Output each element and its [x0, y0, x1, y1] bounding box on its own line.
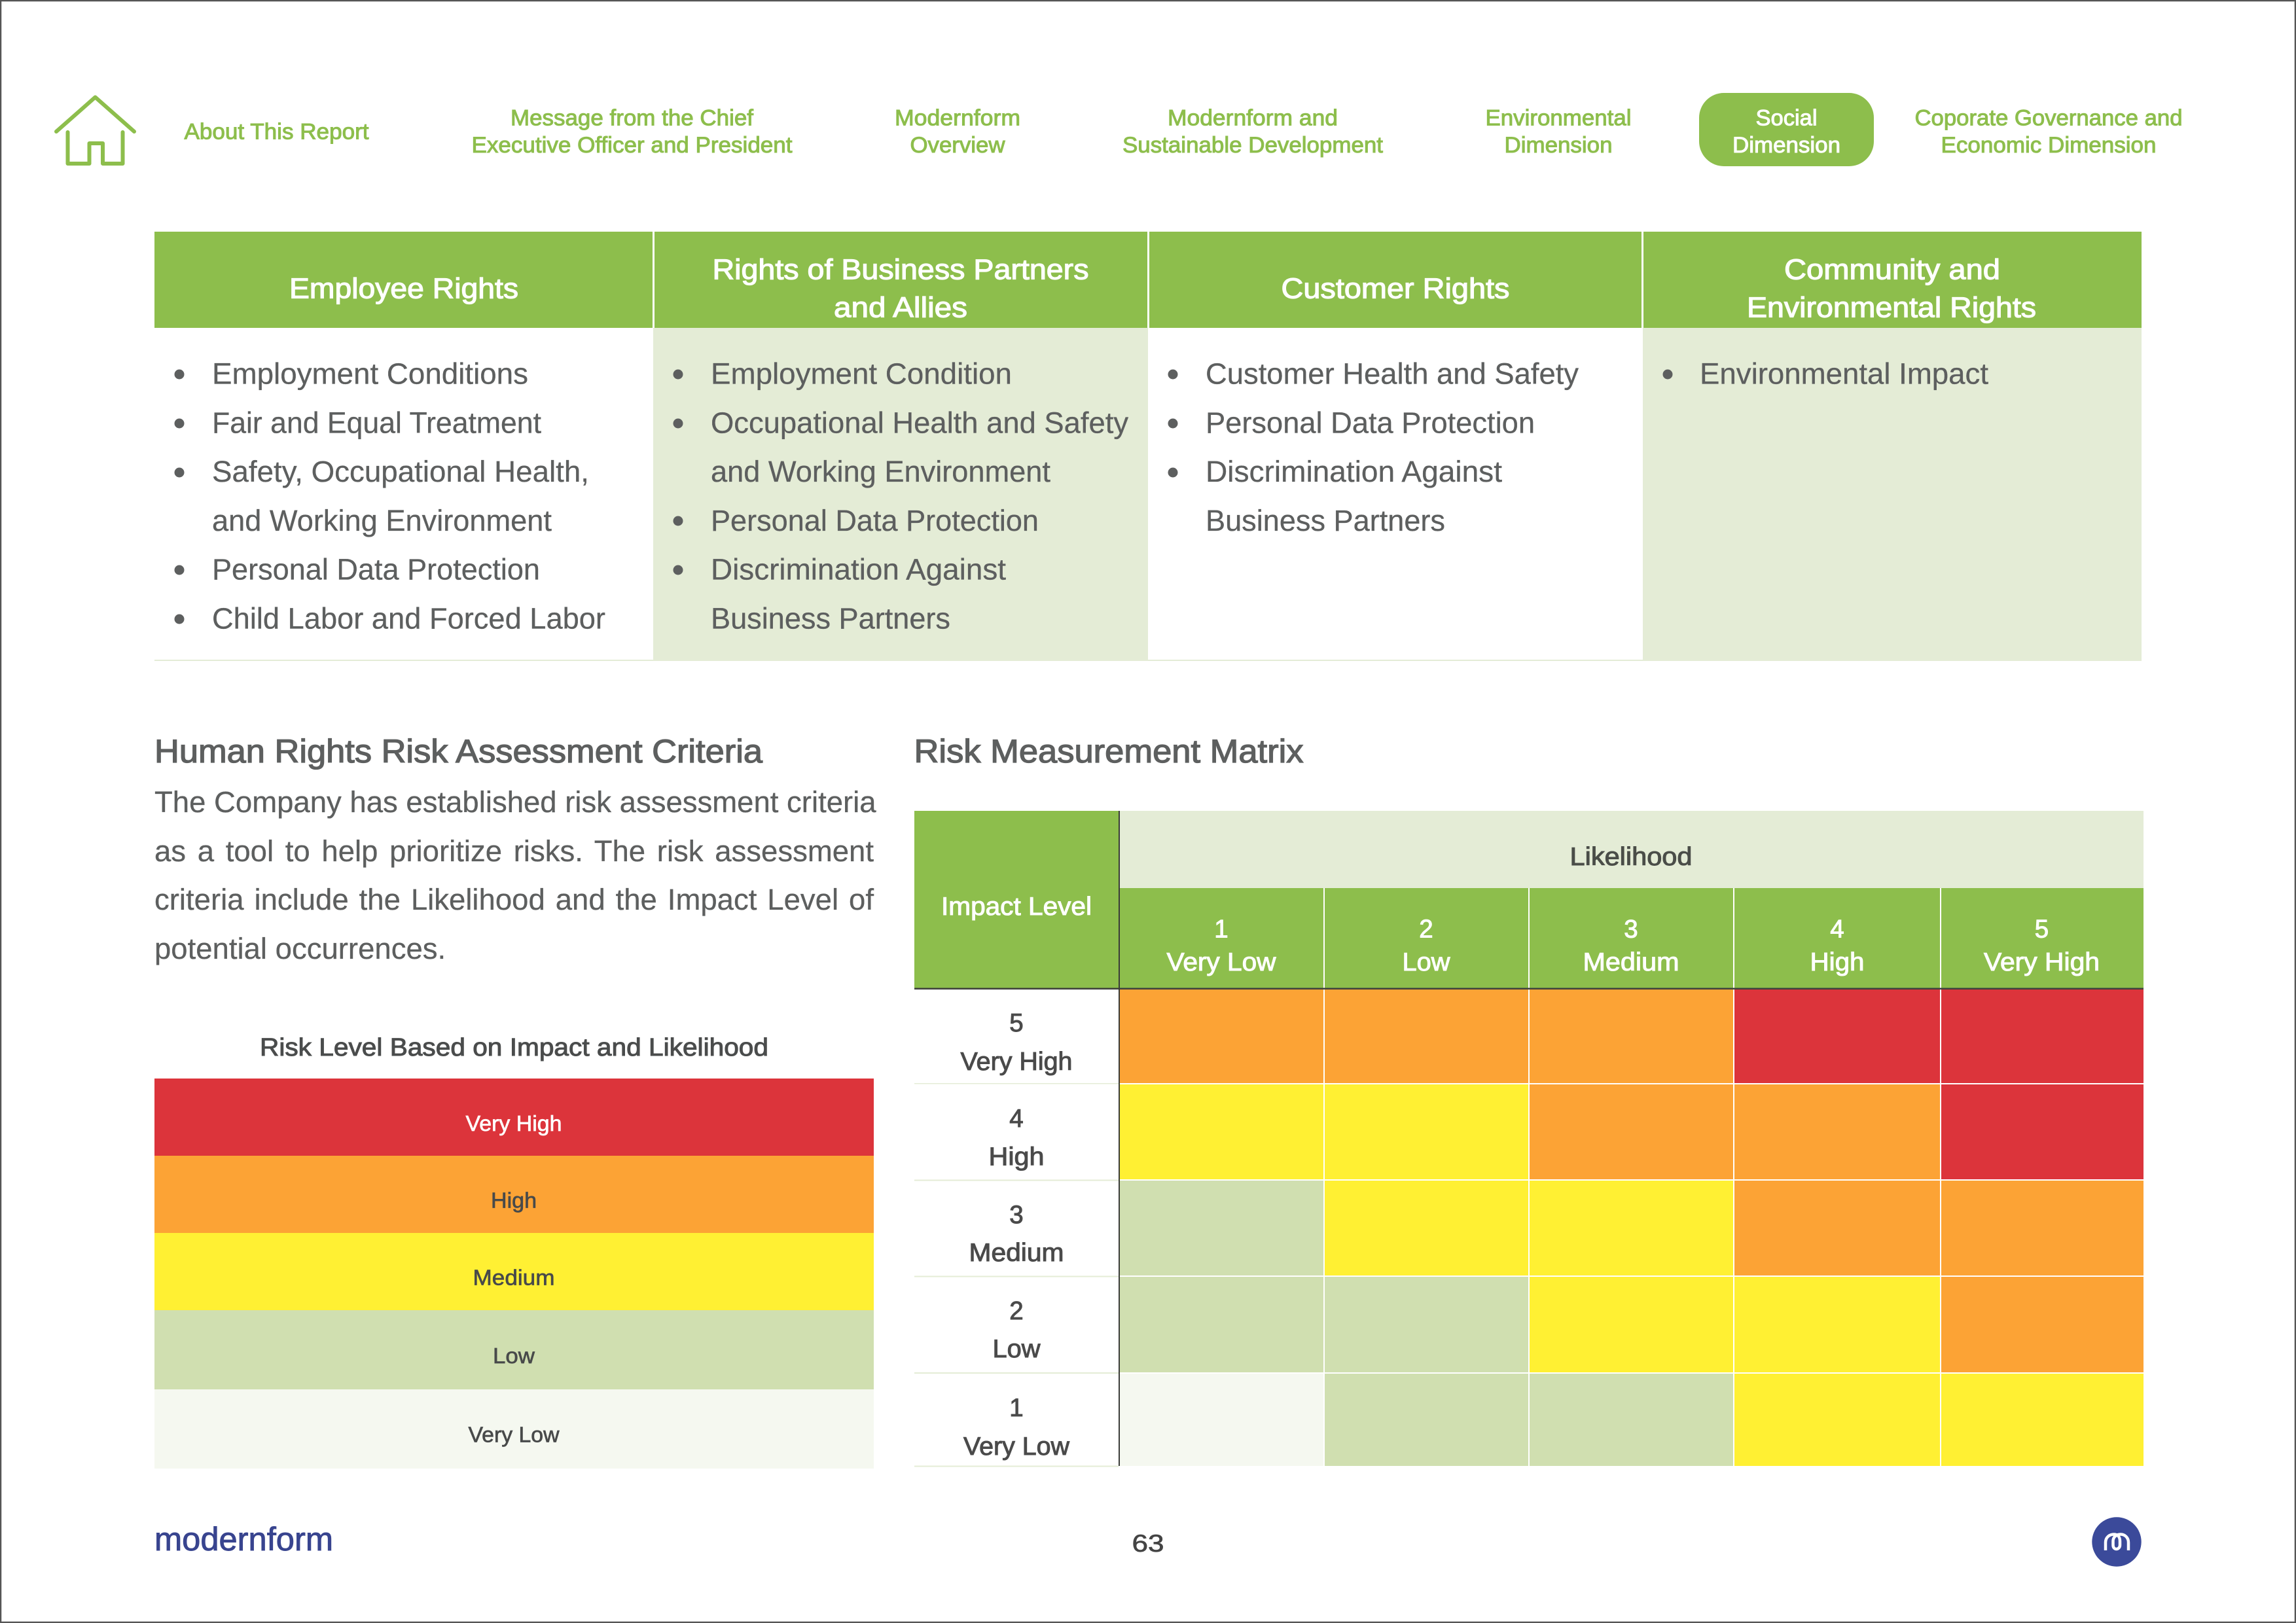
table header row: Environmental Rights [1747, 292, 2036, 323]
table header row [154, 232, 2142, 328]
list: community and environmental rights: Environmental Impact [1700, 357, 1988, 390]
text block: risk assessment description [154, 785, 876, 965]
legend: risk level bars: High [491, 1188, 537, 1213]
matrix header: 1 [1214, 915, 1229, 944]
table header row: Employee Rights [289, 272, 518, 305]
text block: risk assessment description: potential occurrences. [154, 932, 446, 965]
matrix header: Very High [1984, 948, 2100, 976]
nav: corporate governance [1915, 106, 2182, 158]
legend: risk level bars [154, 1079, 874, 1469]
nav: modernform overview [895, 106, 1020, 158]
list: customer rights: Personal Data Protection [1206, 406, 1535, 440]
matrix row labels: 2 [1009, 1297, 1024, 1325]
panel: stakeholder rights table [154, 232, 2142, 661]
legend: risk level bars: Medium [473, 1266, 555, 1291]
matrix row labels: High [988, 1143, 1045, 1171]
list: business partner rights [673, 357, 1128, 635]
matrix row labels: Very High [961, 1048, 1072, 1076]
nav: social dimension active pill: Dimension [1732, 133, 1840, 158]
matrix header: 4 [1830, 915, 1844, 944]
list: customer rights: Discrimination Against [1206, 455, 1502, 488]
matrix row labels: 1 [1009, 1394, 1024, 1422]
nav: about this report: About This Report [185, 119, 369, 144]
list: business partner rights: Discrimination Against [711, 552, 1006, 586]
matrix header: Low [1402, 948, 1450, 976]
list: employee rights: and Working Environment [212, 504, 552, 537]
text block: risk assessment description: as a tool to help prioritize risks. The risk assessment [154, 834, 874, 868]
list: business partner rights: and Working Environment [711, 455, 1050, 488]
list: employee rights: Fair and Equal Treatment [212, 406, 541, 440]
heading: risk level legend: Risk Level Based on Impact and Likelihood [260, 1034, 768, 1061]
matrix row labels [961, 1009, 1072, 1461]
nav: social dimension active pill: Social [1755, 106, 1817, 131]
icon: modernform circular logo [2092, 1517, 2142, 1567]
list: employee rights: Personal Data Protection [212, 552, 540, 586]
matrix row labels: 5 [1009, 1009, 1024, 1037]
list: business partner rights: Business Partners [711, 602, 950, 635]
nav: environmental dimension: Environmental [1486, 106, 1631, 131]
list: customer rights: Customer Health and Safety [1206, 357, 1579, 390]
nav: message from the CEO: Executive Officer and President [471, 133, 793, 158]
table header row: Customer Rights [1282, 272, 1509, 305]
text block: risk assessment description: criteria include the Likelihood and the Impact Level of [154, 883, 874, 916]
matrix heat cells [1120, 990, 2144, 1466]
nav: modernform overview: Overview [910, 133, 1005, 158]
matrix row labels: Very Low [963, 1433, 1069, 1461]
legend: risk level bars: Low [493, 1344, 535, 1368]
navigation menu [185, 93, 2182, 166]
table backgrounds [154, 328, 2142, 661]
legend: risk level bars: Very Low [469, 1423, 560, 1448]
nav: message from the CEO [471, 106, 793, 158]
table header row: and Allies [834, 292, 967, 323]
nav: corporate governance: Economic Dimension [1941, 133, 2156, 158]
nav: modernform overview: Modernform [895, 106, 1020, 131]
nav: environmental dimension: Dimension [1504, 133, 1613, 158]
list: employee rights: Child Labor and Forced Labor [212, 602, 605, 635]
heading: risk assessment criteria: Human Rights Risk Assessment Criteria [154, 733, 762, 770]
matrix header: 2 [1419, 915, 1433, 944]
list: employee rights [174, 357, 605, 635]
icon: home [56, 97, 134, 164]
nav: message from the CEO: Message from the Chief [511, 106, 754, 131]
matrix header: Medium [1583, 948, 1679, 976]
list: employee rights: Safety, Occupational Health, [212, 455, 589, 488]
matrix row labels: Low [992, 1335, 1041, 1363]
list: business partner rights: Occupational Health and Safety [711, 406, 1128, 440]
matrix header: Impact Level [941, 893, 1092, 921]
matrix row labels: 4 [1009, 1105, 1024, 1133]
matrix header [914, 811, 2144, 989]
matrix header: Likelihood [1570, 843, 1693, 871]
list: customer rights: Business Partners [1206, 504, 1445, 537]
text block: risk assessment description: The Company has established risk assessment criteria [154, 785, 876, 819]
list: employee rights: Employment Conditions [212, 357, 528, 390]
matrix axis lines [914, 811, 2144, 1467]
matrix header: Very Low [1166, 948, 1276, 976]
nav: sustainable development: Sustainable Development [1122, 133, 1384, 158]
matrix header: 5 [2035, 915, 2049, 944]
nav: environmental dimension [1486, 106, 1631, 158]
legend: risk level bars: Very High [466, 1112, 562, 1136]
matrix row labels: Medium [969, 1239, 1064, 1267]
list: business partner rights: Employment Condition [711, 357, 1012, 390]
matrix row labels: 3 [1009, 1201, 1024, 1229]
nav: sustainable development: Modernform and [1168, 106, 1338, 131]
nav: social dimension active pill [1699, 93, 1874, 166]
nav: corporate governance: Coporate Governance and [1915, 106, 2182, 131]
list: customer rights [1168, 357, 1579, 537]
table header row: Rights of Business Partners [712, 254, 1089, 285]
heading: risk measurement matrix: Risk Measurement Matrix [914, 733, 1304, 770]
list: business partner rights: Personal Data Protection [711, 504, 1039, 537]
chart: risk measurement matrix [914, 811, 2144, 1467]
matrix header: High [1810, 948, 1864, 976]
nav: sustainable development [1122, 106, 1384, 158]
table header row: Community and [1784, 254, 2000, 285]
page number: 63 [1132, 1530, 1164, 1557]
matrix header: 3 [1624, 915, 1638, 944]
logo: modernform wordmark: modernform [154, 1521, 333, 1558]
